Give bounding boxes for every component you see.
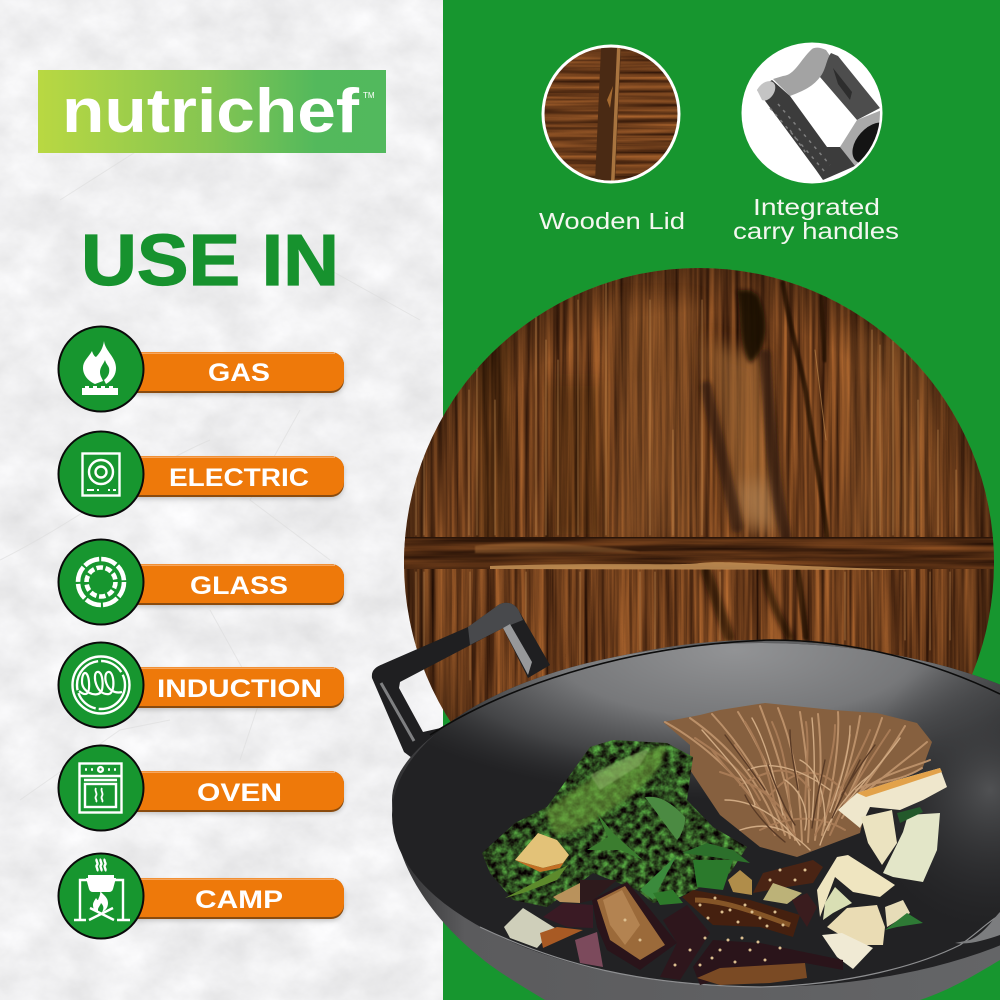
row: camp: CAMP <box>195 886 283 914</box>
row: gas: GAS <box>208 359 270 387</box>
label: integrated carry handles <box>733 194 899 244</box>
icon: electric hob <box>82 454 120 496</box>
row: electric: ELECTRIC <box>169 464 309 492</box>
food: leafy greens <box>480 735 750 910</box>
row: oven <box>58 746 344 830</box>
row: oven: OVEN <box>197 779 282 807</box>
wok <box>372 602 1000 1000</box>
row: gas <box>58 326 344 412</box>
row: glass <box>58 540 344 624</box>
thumbnail: wooden lid <box>540 44 682 186</box>
heading: use in: USE IN <box>81 221 339 301</box>
logo <box>38 70 386 153</box>
panel: marble background <box>0 0 443 1000</box>
thumbnail: carry handle <box>742 42 882 184</box>
wok bowl interior <box>392 643 1000 987</box>
logo: nutrichef <box>62 77 359 146</box>
row: glass: GLASS <box>190 572 288 600</box>
row: camp <box>58 854 344 938</box>
logo: TM <box>363 91 375 100</box>
food: bok choy <box>504 768 947 969</box>
label: wooden lid: Wooden Lid <box>539 208 685 234</box>
label: integrated carry handles: Integrated <box>753 194 880 220</box>
icon: induction coil <box>72 656 130 714</box>
icon: oven <box>80 764 122 812</box>
food: glazed eggplant <box>543 860 843 985</box>
row: electric <box>58 432 344 516</box>
icon: glass cooktop rings <box>78 559 124 605</box>
wok handle <box>372 603 550 758</box>
label: integrated carry handles: carry handles <box>733 218 899 244</box>
row: induction <box>58 642 344 728</box>
row: induction: INDUCTION <box>157 675 322 703</box>
wooden lid photo <box>404 268 994 722</box>
wok body <box>392 640 1000 1000</box>
panel: green background <box>443 0 1000 1000</box>
icon: gas flame <box>82 341 118 395</box>
icon: campfire and pot <box>74 859 130 920</box>
food: enoki mushrooms <box>663 703 932 857</box>
